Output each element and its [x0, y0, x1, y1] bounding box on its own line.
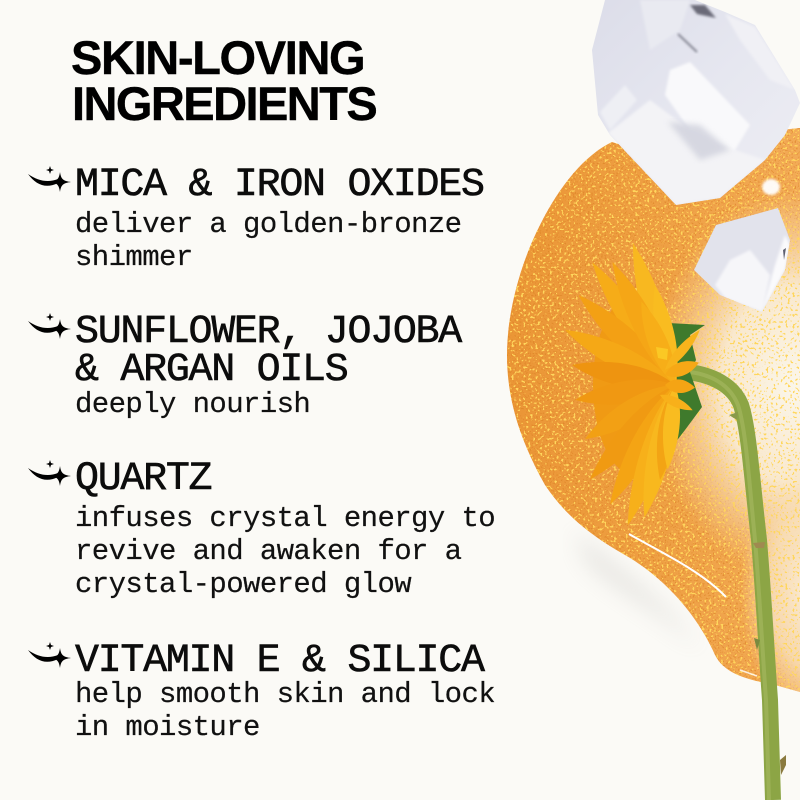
ingredient: sunflower, jojoba and argan oils: [28, 310, 462, 421]
ingredient: sunflower, jojoba and argan oils: deeply nourish: [75, 388, 310, 421]
title: [71, 31, 376, 130]
icon: sparkle swoosh: [28, 642, 71, 668]
ingredient: sunflower, jojoba and argan oils: SUNFLOWER, JOJOBA: [75, 310, 462, 355]
icon: sparkle swoosh: [28, 313, 71, 339]
ingredient: mica and iron oxides: [28, 163, 484, 274]
title: SKIN-LOVING: [71, 31, 364, 84]
ingredient: vitamin e and silica: [28, 639, 495, 744]
ingredient: mica and iron oxides: deliver a golden-bronze: [75, 208, 461, 241]
ingredient: quartz: infuses crystal energy to: [75, 502, 495, 535]
ingredient: mica and iron oxides: shimmer: [75, 241, 193, 274]
icon: sparkle swoosh: [28, 460, 71, 486]
shadow: [575, 530, 700, 650]
product image: shimmer swatch, crystals and sunflower: [500, 0, 800, 800]
ingredient: quartz: [28, 457, 495, 601]
icon: small quartz crystal: [694, 208, 790, 312]
ingredient: quartz: crystal-powered glow: [75, 568, 412, 601]
ingredient: sunflower, jojoba and argan oils: & ARGAN OILS: [75, 348, 348, 393]
icon: sunflower stem: [688, 372, 786, 800]
ingredient: quartz: revive and awaken for a: [75, 535, 462, 568]
ingredient: vitamin e and silica: help smooth skin and lock: [75, 678, 495, 711]
icon: large quartz crystal: [592, 0, 800, 205]
gloss highlight: [629, 534, 726, 597]
ingredient: vitamin e and silica: VITAMIN E & SILICA: [75, 639, 485, 684]
ingredient: quartz: QUARTZ: [75, 457, 212, 502]
icon: sunflower head: [560, 240, 705, 529]
ingredient: mica and iron oxides: MICA & IRON OXIDES: [75, 163, 484, 208]
icon: sparkle swoosh: [28, 166, 71, 192]
title: INGREDIENTS: [72, 77, 376, 130]
ingredient: vitamin e and silica: in moisture: [75, 711, 260, 744]
golden shimmer swatch: [500, 120, 800, 700]
